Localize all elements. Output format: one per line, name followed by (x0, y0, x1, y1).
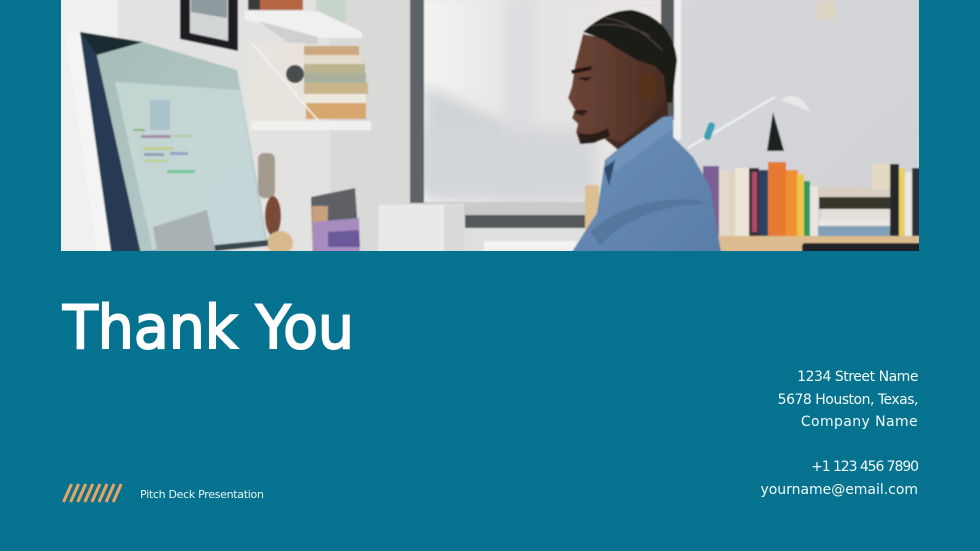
hair (583, 10, 677, 103)
contact details: 1234 Street Name (797, 369, 918, 385)
contact details: Company Name (801, 414, 918, 430)
books (703, 162, 924, 236)
title: Thank You (62, 293, 354, 363)
left wall (61, 0, 329, 251)
laptop (311, 188, 360, 258)
picture frame (180, 0, 238, 51)
icon: orange diagonal stripes (62, 483, 122, 503)
contact details: +1 123 456 7890 (811, 459, 918, 475)
neck (604, 96, 668, 150)
shirt (568, 116, 722, 258)
contact details: yourname@email.com (760, 482, 918, 498)
desk (584, 184, 919, 251)
desk lamp (688, 96, 811, 151)
figurine (258, 153, 293, 255)
man (568, 10, 722, 258)
paper box (378, 204, 464, 251)
monitor (65, 32, 268, 258)
contact details (760, 369, 918, 498)
contact details: 5678 Houston, Texas, (778, 392, 918, 408)
footer label: Pitch Deck Presentation (140, 488, 264, 501)
photo: man working at a desk with a large monitor (61, 0, 919, 251)
backdrop (409, 0, 675, 229)
window (410, 0, 674, 258)
head (568, 34, 668, 144)
lower shelf with books (249, 43, 371, 130)
upper shelf (245, 0, 362, 44)
wall switch (817, 1, 836, 20)
right wall (900, 166, 919, 171)
